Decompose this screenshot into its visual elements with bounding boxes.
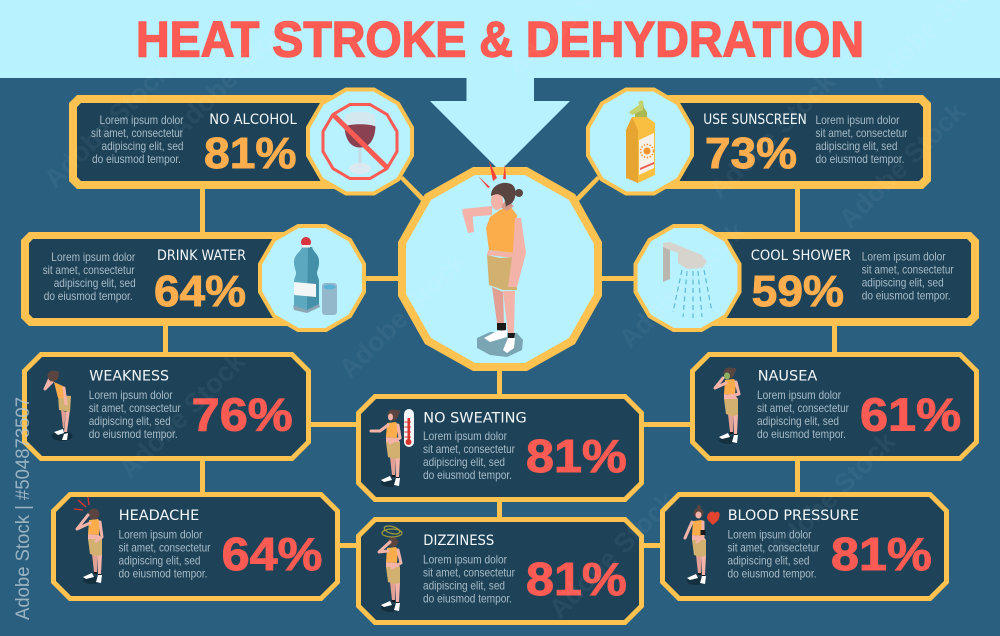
drink water description: adipiscing elit, sed — [54, 277, 136, 290]
stock watermarks: Adobe Stock — [613, 216, 752, 354]
blood pressure label: BLOOD PRESSURE — [728, 507, 859, 524]
no alcohol description: adipiscing elit, sed — [102, 140, 184, 153]
use sunscreen description: do eiusmod tempor. — [816, 153, 904, 166]
cool shower description: sit amet, consectetur — [862, 264, 954, 276]
headache description — [118, 528, 211, 580]
headache description: sit amet, consectetur — [118, 541, 211, 554]
use sunscreen description: Lorem ipsum dolor — [816, 114, 900, 127]
headache description: do eiusmod tempor. — [118, 567, 208, 580]
panel: nausea — [690, 352, 979, 461]
figure: woman holding her head — [74, 497, 102, 584]
drink water percentage: 64% — [154, 268, 246, 316]
no alcohol description: Lorem ipsum dolor — [100, 114, 184, 127]
cool shower description — [862, 250, 954, 302]
headache description: Lorem ipsum dolor — [118, 528, 203, 541]
use sunscreen description: sit amet, consectetur — [816, 127, 908, 140]
weakness description: adipiscing elit, sed — [89, 415, 171, 428]
dizziness description — [423, 553, 515, 605]
dizziness percentage: 81% — [526, 553, 627, 605]
title band with downward arrow — [0, 0, 1000, 171]
stock watermarks: Adobe Stock — [833, 96, 972, 234]
stock watermarks: Adobe Stock — [763, 426, 902, 564]
no sweating percentage: 81% — [526, 430, 627, 482]
panel: no alcohol — [69, 88, 414, 196]
blood pressure percentage: 81% — [831, 528, 932, 580]
no alcohol description: sit amet, consectetur — [91, 127, 183, 140]
no sweating description: do eiusmod tempor. — [423, 469, 512, 482]
panel: blood pressure — [660, 492, 949, 601]
headache percentage: 64% — [222, 528, 322, 580]
figure: woman with thermometer — [371, 409, 414, 487]
dizziness description: do eiusmod tempor. — [423, 592, 512, 605]
central figure medallion — [398, 161, 602, 371]
stock watermarks: Adobe Stock — [543, 486, 682, 624]
no sweating label: NO SWEATING — [423, 410, 527, 427]
headache description: adipiscing elit, sed — [118, 554, 200, 567]
drink water description — [43, 251, 136, 303]
dizziness label: DIZZINESS — [423, 532, 494, 549]
panel: dizziness — [356, 517, 644, 625]
weakness label: WEAKNESS — [89, 368, 169, 385]
figure: woman with blood pressure cuff — [685, 505, 720, 585]
cool shower label: COOL SHOWER — [751, 247, 851, 264]
use sunscreen percentage: 73% — [705, 130, 797, 178]
no sweating description: adipiscing elit, sed — [423, 456, 505, 469]
weakness description: Lorem ipsum dolor — [89, 389, 173, 402]
figure: woman bending forward — [45, 370, 72, 441]
blood pressure description: Lorem ipsum dolor — [728, 528, 812, 541]
cool shower description: do eiusmod tempor. — [862, 290, 951, 302]
stock watermarks: Adobe Stock — [38, 56, 177, 194]
icon: shower head — [634, 224, 742, 332]
connector lines — [163, 176, 837, 548]
nausea description: adipiscing elit, sed — [757, 415, 839, 428]
use sunscreen description: adipiscing elit, sed — [816, 140, 898, 153]
nausea description — [757, 389, 849, 441]
drink water description: sit amet, consectetur — [43, 264, 135, 277]
drink water description: do eiusmod tempor. — [44, 290, 133, 303]
panel: headache — [51, 492, 340, 601]
central woman with heat stroke — [462, 161, 526, 357]
nausea description: do eiusmod tempor. — [757, 428, 846, 441]
icon: crossed-out wine glass — [306, 88, 414, 196]
use sunscreen description — [816, 114, 908, 166]
weakness percentage: 76% — [192, 389, 293, 441]
icon: water bottle and glass — [258, 224, 366, 332]
panel: drink water — [21, 224, 366, 332]
no alcohol label: NO ALCOHOL — [209, 111, 298, 128]
no sweating description: sit amet, consectetur — [423, 443, 515, 456]
use sunscreen label: USE SUNSCREEN — [703, 111, 807, 128]
figure: nauseous woman — [715, 368, 739, 444]
weakness description: sit amet, consectetur — [89, 402, 181, 415]
nausea percentage: 61% — [860, 389, 961, 441]
blood pressure description — [728, 528, 820, 580]
headache label: HEADACHE — [119, 507, 199, 524]
cool shower description: adipiscing elit, sed — [862, 276, 944, 290]
no alcohol description — [91, 114, 184, 166]
no sweating description — [423, 430, 515, 482]
title: HEAT STROKE & DEHYDRATION — [136, 12, 864, 68]
panel: weakness — [22, 352, 311, 461]
nausea label: NAUSEA — [758, 368, 817, 385]
no alcohol percentage: 81% — [204, 130, 296, 178]
drink water label: DRINK WATER — [157, 247, 246, 264]
blood pressure description: do eiusmod tempor. — [728, 567, 816, 580]
cool shower percentage: 59% — [752, 268, 844, 316]
dizziness description: adipiscing elit, sed — [423, 579, 505, 592]
stock watermarks: Adobe Stock — [333, 246, 472, 384]
nausea description: sit amet, consectetur — [757, 402, 849, 415]
stock watermarks: Adobe Stock — [163, 6, 302, 144]
weakness description: do eiusmod tempor. — [89, 428, 178, 441]
vertical stock credit: Adobe Stock | #504873507 — [12, 397, 34, 620]
blood pressure description: adipiscing elit, sed — [728, 554, 810, 567]
figure: dizzy woman — [379, 525, 402, 612]
no sweating description: Lorem ipsum dolor — [423, 430, 507, 443]
panel: cool shower — [634, 224, 979, 332]
drink water description: Lorem ipsum dolor — [51, 251, 135, 264]
weakness description — [89, 389, 181, 441]
stock watermarks: Adobe Stock — [703, 66, 842, 204]
cool shower description: Lorem ipsum dolor — [862, 250, 946, 264]
dizziness description: sit amet, consectetur — [423, 566, 515, 579]
blood pressure description: sit amet, consectetur — [728, 541, 820, 554]
no alcohol description: do eiusmod tempor. — [92, 153, 181, 166]
stock watermarks: Adobe Stock — [113, 346, 252, 484]
dizziness description: Lorem ipsum dolor — [423, 553, 507, 566]
nausea description: Lorem ipsum dolor — [757, 389, 841, 402]
panel: use sunscreen — [586, 88, 931, 196]
icon: sunscreen bottle — [586, 88, 694, 196]
panel: no sweating — [356, 394, 644, 502]
